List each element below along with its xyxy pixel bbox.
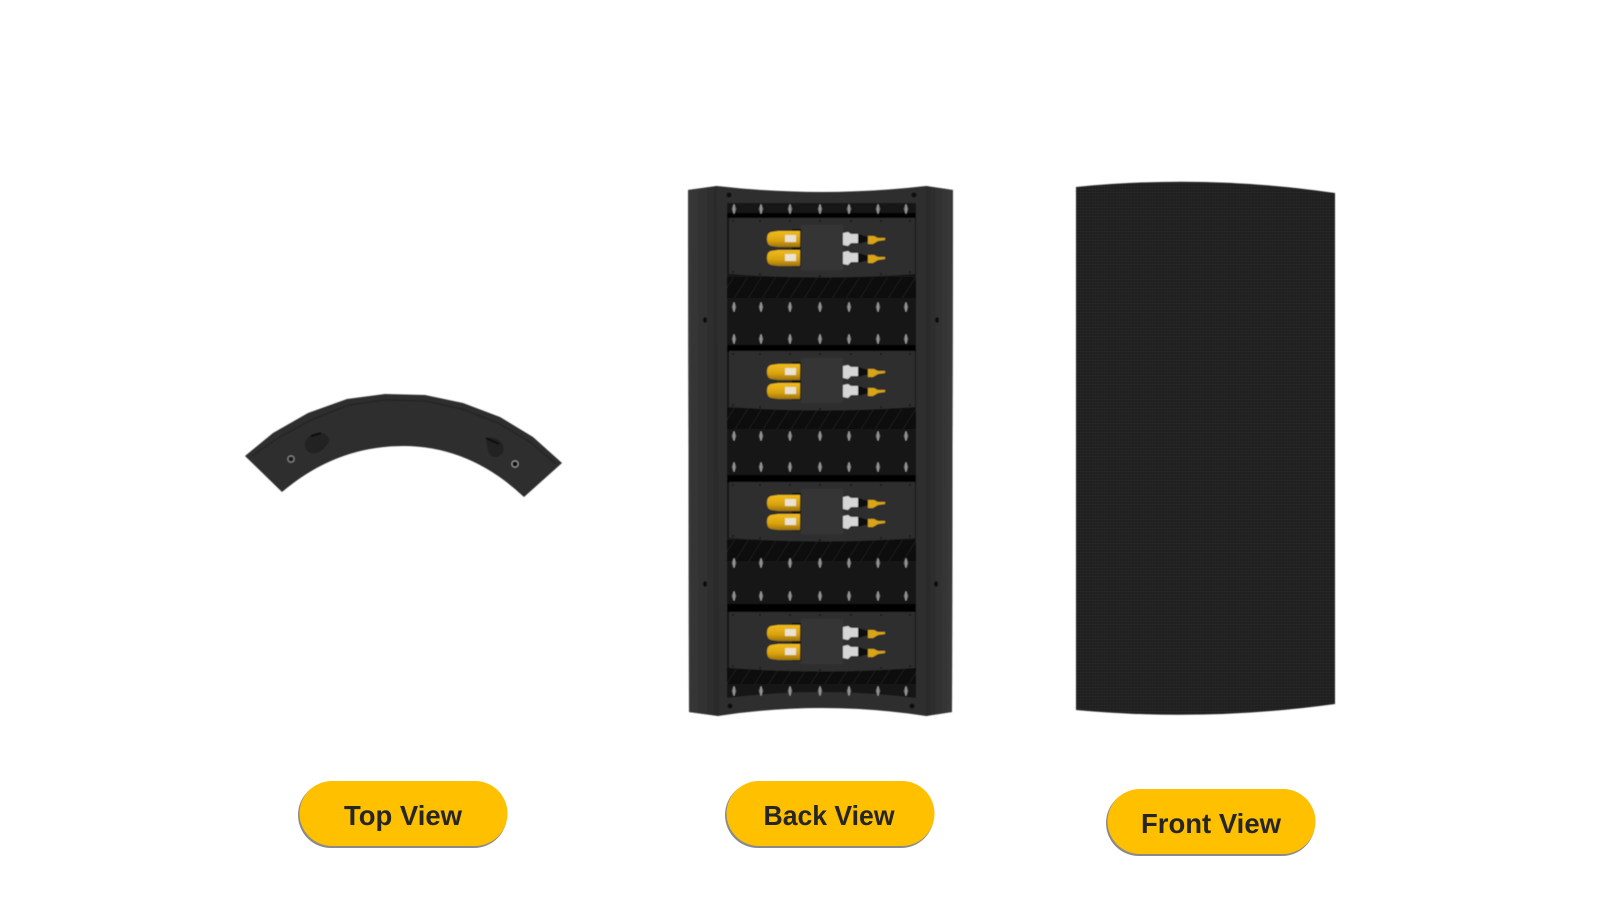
- inner opening: [727, 203, 916, 698]
- hatched bands: [727, 277, 916, 684]
- icon: left recess: [305, 433, 329, 453]
- icon: right recess: [486, 438, 504, 457]
- left side wall: [688, 186, 719, 716]
- illustration: top view of curved cabinet: [245, 394, 562, 497]
- button: Front View: [1106, 789, 1316, 856]
- illustration: back view of curved cabinet: [688, 186, 953, 716]
- button: Back View: Back View: [764, 800, 895, 831]
- button: Top View: Top View: [344, 800, 462, 831]
- bolt rows: [732, 204, 908, 696]
- icon: right screw hole: [512, 461, 518, 467]
- button: Top View: [298, 781, 508, 848]
- connector module 1: [729, 218, 915, 278]
- icon: left screw hole: [288, 456, 294, 462]
- right side wall: [926, 186, 953, 716]
- illustration: front view LED face: [1076, 182, 1335, 715]
- connector module 2: [729, 351, 915, 410]
- dark rails: [727, 213, 916, 612]
- cabinet frame: [688, 186, 953, 716]
- connector module 3: [729, 482, 915, 542]
- button: Front View: Front View: [1141, 808, 1281, 839]
- corner and side screws: [703, 192, 939, 708]
- connector module 4: [729, 612, 915, 672]
- button: Back View: [725, 781, 934, 848]
